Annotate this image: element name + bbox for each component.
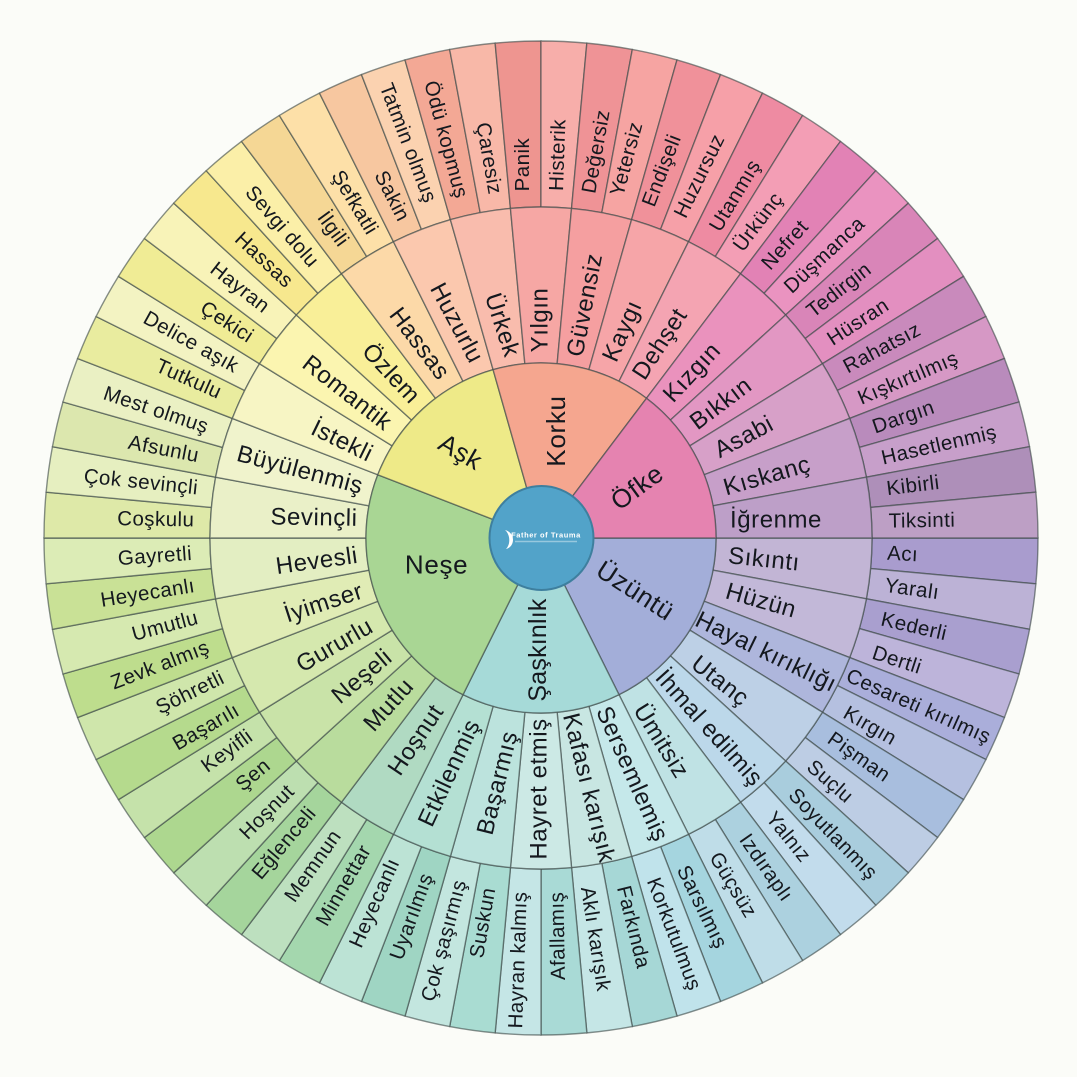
- outer ring labels: Aşk family: Şefkatli: [327, 166, 383, 239]
- outer ring labels: Öfke family: Rahatsız: [839, 318, 925, 378]
- outer ring labels: Üzüntü family: Yalnız: [761, 807, 816, 867]
- middle ring labels: Öfke family: [658, 337, 822, 534]
- outer ring labels: Üzüntü family: Suçlu: [802, 755, 858, 808]
- outer ring labels: Şaşkınlık family: Afallamış: [545, 892, 570, 980]
- outer ring labels: Korku family: Endişeli: [637, 131, 686, 210]
- outer ring labels: Aşk family: Afsunlu: [126, 431, 201, 467]
- middle ring labels: Neşe family: [234, 440, 449, 780]
- middle ring labels: Korku family: Dehşet: [627, 303, 693, 385]
- outer ring labels: Üzüntü family: Acı: [887, 542, 919, 566]
- outer ring labels: Aşk family: Delice aşık: [139, 306, 243, 378]
- outer ring labels: Neşe family: Minnettar: [311, 841, 376, 930]
- middle ring labels: Korku family: Kaygı: [597, 296, 648, 366]
- middle ring labels: Şaşkınlık family: Sersemlemiş: [590, 702, 674, 846]
- heading: Üzüntü: Üzüntü: [591, 554, 680, 627]
- outer ring labels: Neşe family: Eğlenceli: [247, 802, 321, 884]
- outer ring labels: Şaşkınlık family: Farkında: [612, 883, 655, 971]
- outer ring labels: Neşe family: [83, 465, 376, 930]
- outer ring labels: Üzüntü family: Yaralı: [883, 574, 941, 604]
- outer ring labels: Aşk family: Sakin: [370, 167, 414, 225]
- outer ring labels: Öfke family: Tiksinti: [888, 509, 956, 533]
- outer ring labels: Öfke family: Hüsran: [823, 294, 893, 350]
- middle ring labels: Şaşkınlık family: Etkilenmiş: [413, 715, 486, 831]
- middle ring labels: Neşe family: Neşeli: [327, 644, 397, 709]
- outer ring labels: Aşk family: Çekici: [196, 296, 258, 348]
- outer ring labels: Korku family: Ürkünç: [728, 188, 788, 256]
- outer ring labels: Öfke family: [757, 212, 999, 533]
- middle ring labels: Neşe family: Sevinçli: [270, 503, 358, 532]
- middle ring labels: Üzüntü family: Sıkıntı: [727, 542, 801, 577]
- outer ring labels: Neşe family: Şen: [231, 754, 275, 796]
- outer ring labels: Şaşkınlık family: Çok şaşırmış: [417, 877, 471, 1004]
- outer ring labels: Neşe family: Gayretli: [117, 542, 193, 570]
- outer ring labels: Aşk family: İlgili: [313, 207, 353, 251]
- heading: Neşe: Neşe: [405, 550, 468, 580]
- outer ring labels: Korku family: Histerik: [545, 118, 570, 191]
- middle ring labels: Üzüntü family: Ümitsiz: [628, 699, 694, 783]
- inner ring: six core emotion sectors: [366, 363, 716, 713]
- outer ring labels: Üzüntü family: Güçsüz: [705, 848, 761, 922]
- outer ring labels: Üzüntü family: Soyutlanmış: [784, 784, 882, 884]
- outer ring labels: Öfke family: Kibirli: [885, 471, 941, 500]
- middle ring labels: Neşe family: Büyülenmiş: [234, 440, 366, 500]
- center logo circle: [490, 486, 594, 590]
- middle ring: 34 feeling wedges: [204, 203, 878, 873]
- outer ring labels: Aşk family: [101, 80, 441, 467]
- outer ring labels: Neşe family: Zevk almış: [108, 636, 212, 694]
- middle ring labels: Aşk family: İstekli: [307, 415, 377, 467]
- middle ring labels: Aşk family: [297, 278, 489, 467]
- outer ring labels: Neşe family: Keyifli: [197, 725, 257, 777]
- middle ring labels: Aşk family: Hassas: [384, 302, 455, 385]
- outer ring labels: Şaşkınlık family: Suskun: [465, 886, 500, 960]
- outer ring labels: Üzüntü family: Dertli: [869, 641, 925, 679]
- outer ring labels: Korku family: Çaresiz: [471, 121, 507, 196]
- outer ring labels: Neşe family: Heyecanlı: [99, 574, 197, 612]
- middle ring labels: Üzüntü family: Hayal kırıklığı: [691, 606, 841, 698]
- middle ring labels: Aşk family: Özlem: [357, 338, 425, 409]
- middle ring labels: Öfke family: Kızgın: [658, 337, 726, 408]
- outer ring labels: Öfke family: Nefret: [757, 216, 813, 274]
- outer ring labels: Öfke family: Tedirgin: [802, 258, 876, 322]
- middle ring labels: Üzüntü family: Utanç: [686, 650, 754, 712]
- middle ring labels: Öfke family: Bıkkın: [685, 372, 757, 435]
- outer ring labels: Neşe family: Şöhretli: [152, 666, 228, 719]
- outer ring labels: Aşk family: Sevgi dolu: [240, 181, 324, 272]
- outer ring labels: Üzüntü family: [705, 542, 994, 922]
- outer ring labels: Korku family: Huzursuz: [669, 130, 730, 222]
- middle ring labels: Neşe family: Hoşnut: [383, 700, 449, 780]
- outer ring labels: Aşk family: Hayran: [206, 257, 274, 318]
- middle ring labels: Öfke family: Asabi: [710, 410, 778, 464]
- outer ring labels: Şaşkınlık family: Sarsılmış: [672, 862, 732, 952]
- middle ring labels: Öfke family: İğrenme: [730, 506, 822, 534]
- outer ring labels: Neşe family: Başarılı: [169, 699, 243, 755]
- middle ring labels: Neşe family: Hevesli: [274, 542, 360, 580]
- outer ring labels: Şaşkınlık family: Aklı karışık: [576, 885, 615, 993]
- outer ring labels: Korku family: [419, 78, 788, 256]
- middle ring labels: Korku family: Güvensiz: [562, 251, 608, 359]
- outer ring labels: Öfke family: Kışkırtılmış: [854, 347, 962, 409]
- outer ring labels: Neşe family: Coşkulu: [117, 507, 195, 531]
- outer ring labels: Neşe family: Memnun: [280, 826, 346, 906]
- heading: Öfke: Öfke: [605, 458, 669, 516]
- outer ring labels: Aşk family: Mest olmuş: [101, 382, 211, 438]
- middle ring labels: Aşk family: Huzurlu: [424, 278, 489, 368]
- outer ring labels: Üzüntü family: Kederli: [879, 608, 949, 645]
- outer ring labels: Neşe family: Umutlu: [129, 606, 201, 646]
- outer ring labels: Aşk family: Hassas: [230, 227, 298, 293]
- outer ring labels: Aşk family: Tutkulu: [152, 354, 225, 404]
- outer ring labels: Öfke family: Dargın: [869, 396, 938, 438]
- logo name: Father of Trauma: [511, 530, 581, 540]
- outer ring labels: Şaşkınlık family: Korkutulmuş: [642, 874, 706, 994]
- middle ring labels: Öfke family: Kıskanç: [720, 451, 814, 501]
- middle ring labels: Korku family: Yılgın: [526, 288, 554, 352]
- outer ring labels: Şaşkınlık family: Hayran kalmış: [504, 891, 532, 1029]
- outer ring labels: Neşe family: Çok sevinçli: [83, 465, 199, 499]
- outer ring labels: Üzüntü family: Kırgın: [839, 701, 901, 750]
- outer ring labels: Aşk family: Tatmin olmuş: [375, 80, 441, 206]
- middle ring labels: Neşe family: Gururlu: [292, 613, 378, 678]
- middle ring labels: Şaşkınlık family: [413, 702, 674, 866]
- outer ring labels: Öfke family: Hasetlenmiş: [879, 421, 999, 469]
- outer ring labels: Korku family: Yetersiz: [606, 119, 647, 199]
- heading: Korku: Korku: [541, 395, 571, 467]
- middle ring labels: Neşe family: İyimser: [281, 578, 366, 628]
- outer ring labels: Üzüntü family: Izdıraplı: [735, 829, 797, 906]
- middle ring labels: Şaşkınlık family: Hayret etmiş: [526, 718, 552, 860]
- icon: white crescent logo mark: [505, 530, 513, 549]
- outer ring labels: Neşe family: Hoşnut: [235, 780, 299, 844]
- heading: Şaşkınlık: Şaşkınlık: [524, 598, 552, 702]
- outer ring labels: Üzüntü family: Pişman: [823, 727, 895, 787]
- middle ring labels: Korku family: Ürkek: [479, 290, 525, 361]
- middle ring labels: Neşe family: Mutlu: [358, 673, 419, 737]
- outer ring labels: Üzüntü family: Cesareti kırılmış: [843, 664, 994, 749]
- outer ring labels: Korku family: Değersiz: [577, 108, 615, 195]
- outer ring labels: Şaşkınlık family: Uyarılmış: [385, 870, 438, 963]
- outer ring labels: Öfke family: Düşmanca: [780, 212, 870, 298]
- middle ring labels: Şaşkınlık family: Başarmış: [472, 728, 523, 838]
- middle ring labels: Üzüntü family: [628, 542, 841, 792]
- middle ring labels: Korku family: [479, 251, 693, 385]
- outer ring labels: Şaşkınlık family: Heyecanlı: [345, 855, 404, 951]
- middle ring labels: Üzüntü family: Hüzün: [723, 578, 799, 624]
- outer ring labels: Korku family: Panik: [511, 138, 534, 191]
- middle ring labels: Üzüntü family: İhmal edilmiş: [650, 664, 768, 792]
- core emotion labels: [405, 395, 680, 702]
- outer ring labels: Şaşkınlık family: [345, 855, 732, 1029]
- heading: Aşk: Aşk: [434, 427, 488, 476]
- middle ring labels: Aşk family: Romantik: [297, 350, 397, 436]
- middle ring labels: Şaşkınlık family: Kafası karışık: [557, 710, 620, 866]
- outer ring labels: Korku family: Utanmış: [705, 156, 765, 236]
- outer ring labels: Korku family: Ödü kopmuş: [419, 78, 473, 201]
